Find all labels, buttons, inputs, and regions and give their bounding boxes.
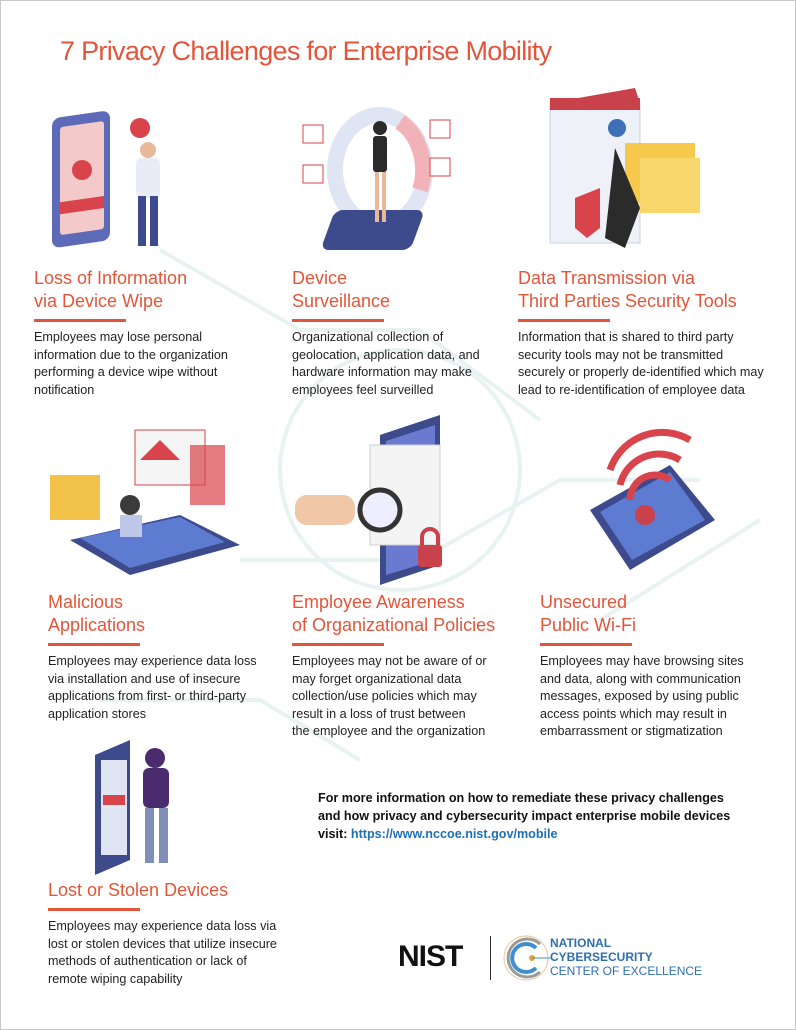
body text: lost or stolen devices that utilize insecure xyxy=(48,936,277,950)
body text: notification xyxy=(34,382,94,396)
heading: of Organizational Policies xyxy=(292,615,495,635)
body text: methods of authentication or lack of xyxy=(48,954,247,968)
body text: securely or properly de-identified which may xyxy=(518,365,764,379)
body text: Organizational collection of xyxy=(292,330,443,344)
body text: Employees may not be aware of or xyxy=(292,654,487,668)
body text: hardware information may make xyxy=(292,365,472,379)
body text: via installation and use of insecure xyxy=(48,672,241,686)
body text xyxy=(540,654,744,738)
body text: security tools may not be transmitted xyxy=(518,348,723,362)
body text: Employees may have browsing sites xyxy=(540,654,744,668)
NCCoE text xyxy=(550,936,702,978)
body text: Information that is shared to third party xyxy=(518,330,734,344)
heading: Third Parties Security Tools xyxy=(518,291,737,311)
heading: Employee Awareness xyxy=(292,592,465,612)
heading xyxy=(518,268,737,311)
heading xyxy=(48,592,145,635)
NCCoE emblem xyxy=(504,936,551,980)
title: 7 Privacy Challenges for Enterprise Mobility xyxy=(60,36,551,66)
illustration: unsecured wifi xyxy=(590,428,715,570)
heading: Applications xyxy=(48,615,145,635)
heading: Malicious xyxy=(48,592,123,612)
body text: the employee and the organization xyxy=(292,724,485,738)
illustration: data transmission xyxy=(550,88,700,248)
NCCoE text: NATIONAL xyxy=(550,936,611,950)
NCCoE text: CYBERSECURITY xyxy=(550,950,653,964)
more information callout: For more information on how to remediate these privacy challenges xyxy=(318,791,724,805)
body text: Employees may experience data loss xyxy=(48,654,257,668)
heading: Loss of Information xyxy=(34,268,187,288)
logos: NIST and NCCoE xyxy=(398,936,702,980)
body text: employees feel surveilled xyxy=(292,382,433,396)
body text xyxy=(292,654,487,738)
heading: Lost or Stolen Devices xyxy=(48,880,228,900)
section: malicious applications xyxy=(48,592,257,720)
body text xyxy=(518,330,764,396)
more information callout: and how privacy and cybersecurity impact enterprise mobile devices xyxy=(318,809,730,823)
body text xyxy=(48,919,277,986)
body text: Employees may lose personal xyxy=(34,330,202,344)
body text: performing a device wipe without xyxy=(34,365,217,379)
divider brace xyxy=(490,936,491,980)
section: data transmission xyxy=(518,268,764,396)
heading: Data Transmission via xyxy=(518,268,695,288)
heading xyxy=(34,268,187,311)
heading: Unsecured xyxy=(540,592,627,612)
body text: access points which may result in xyxy=(540,706,727,720)
heading: via Device Wipe xyxy=(34,291,163,311)
heading: Public Wi-Fi xyxy=(540,615,636,635)
NIST wordmark: NIST xyxy=(398,940,462,973)
body text: result in a loss of trust between xyxy=(292,706,466,720)
section: lost or stolen devices xyxy=(48,880,277,986)
body text: collection/use policies which may xyxy=(292,689,477,703)
illustration: malicious apps xyxy=(50,430,240,575)
body text: geolocation, application data, and xyxy=(292,348,480,362)
body text: embarrassment or stigmatization xyxy=(540,724,723,738)
body text: application stores xyxy=(48,706,146,720)
NCCoE text: CENTER OF EXCELLENCE xyxy=(550,964,702,978)
heading xyxy=(292,268,390,311)
section: device surveillance xyxy=(292,268,480,396)
heading xyxy=(292,592,495,635)
more information callout: visit: https://www.nccoe.nist.gov/mobile xyxy=(318,827,558,841)
body text xyxy=(292,330,480,396)
illustration: lost or stolen xyxy=(95,740,169,875)
illustration: employee awareness xyxy=(295,415,442,585)
illustration: surveillance xyxy=(302,107,450,250)
body text: messages, exposed by using public xyxy=(540,689,739,703)
body text xyxy=(34,330,228,396)
section: unsecured public wifi xyxy=(540,592,744,738)
heading: Surveillance xyxy=(292,291,390,311)
section: employee awareness xyxy=(292,592,495,738)
body text: may forget organizational data xyxy=(292,672,461,686)
heading: Device xyxy=(292,268,347,288)
body text: remote wiping capability xyxy=(48,972,182,986)
more information callout xyxy=(318,791,730,841)
section: loss of information via device wipe xyxy=(34,268,228,396)
body text: and data, along with communication xyxy=(540,672,741,686)
body text: information due to the organization xyxy=(34,348,228,362)
body text: Employees may experience data loss via xyxy=(48,919,276,933)
illustration: device wipe xyxy=(52,111,160,248)
body text: lead to re-identification of employee data xyxy=(518,382,745,396)
body text xyxy=(48,654,257,720)
heading xyxy=(540,592,636,635)
body text: applications from first- or third-party xyxy=(48,689,246,703)
